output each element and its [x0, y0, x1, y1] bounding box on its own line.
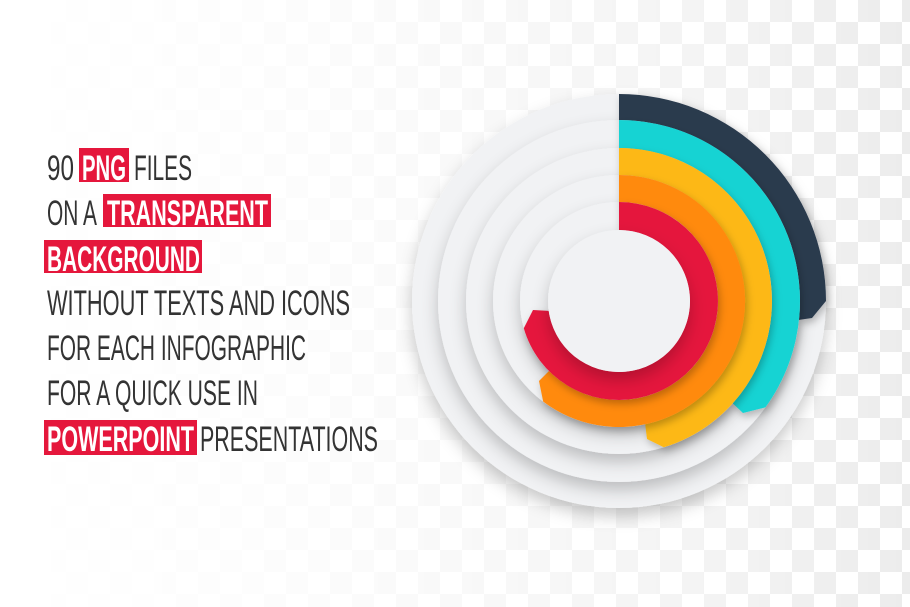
text block: POWERPOINT — [47, 420, 194, 459]
arc: yellow — [619, 148, 772, 447]
text block — [44, 148, 378, 459]
chart: concentric radial bars — [412, 94, 826, 508]
text block: BACKGROUND — [47, 240, 200, 279]
text block: PRESENTATIONS — [200, 420, 378, 459]
highlight boxes — [44, 148, 271, 455]
text block: FOR A QUICK USE IN — [47, 374, 258, 413]
text block: PNG — [82, 149, 126, 188]
center disc — [548, 230, 690, 372]
arc: cyan — [619, 120, 800, 413]
arc: navy — [619, 94, 826, 320]
text block: ON A — [47, 194, 97, 233]
text block: WITHOUT TEXTS AND ICONS — [47, 284, 350, 323]
text block: 90 — [47, 149, 74, 188]
text block: FOR EACH INFOGRAPHIC — [47, 329, 306, 368]
arc: orange — [539, 175, 745, 427]
disc layers — [412, 94, 826, 508]
arc: red — [524, 202, 718, 400]
text block: FILES — [134, 149, 192, 188]
text block: TRANSPARENT — [107, 194, 268, 233]
